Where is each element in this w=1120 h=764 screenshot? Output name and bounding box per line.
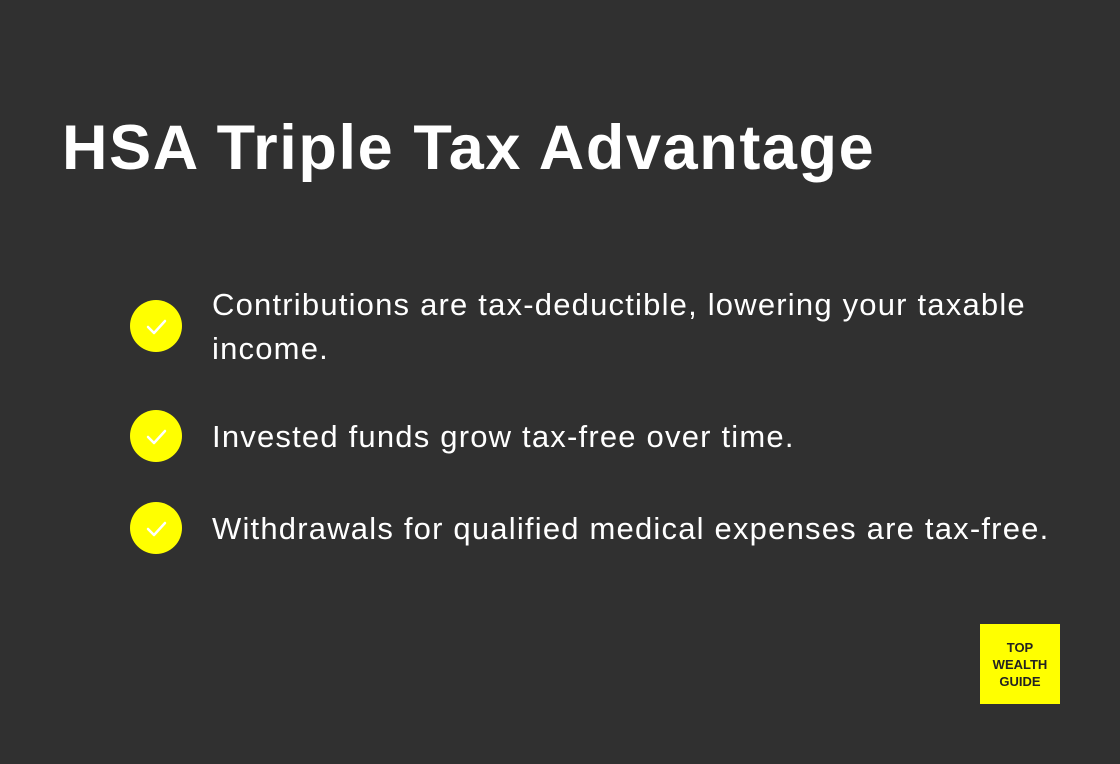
- text 3: Withdrawals for qualified medical expenses are tax-free.: [212, 511, 1049, 546]
- item 2: [130, 410, 795, 462]
- logo: [980, 624, 1060, 704]
- logo: WEALTH: [993, 656, 1047, 672]
- text 1: Contributions are tax-deductible, lowering your taxable income.: [212, 287, 1026, 366]
- icon: check: [130, 300, 182, 352]
- text 2: Invested funds grow tax-free over time.: [212, 419, 795, 454]
- item 3: [130, 502, 1049, 554]
- icon: check: [130, 410, 182, 462]
- title: HSA Triple Tax Advantage: [62, 113, 875, 183]
- logo: GUIDE: [999, 674, 1041, 688]
- logo: TOP: [1007, 640, 1033, 654]
- item 1: [130, 287, 1026, 366]
- icon: check: [130, 502, 182, 554]
